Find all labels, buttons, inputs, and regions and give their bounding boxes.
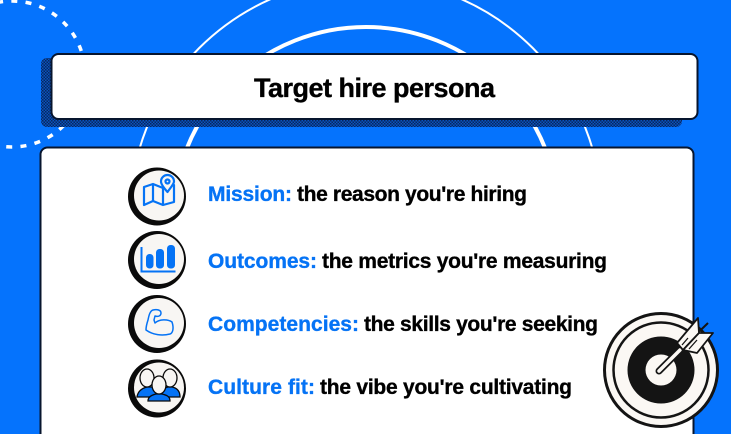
header drop shadow bbox=[41, 58, 682, 127]
arrow bbox=[659, 318, 713, 371]
icon: flexed arm bbox=[128, 295, 186, 353]
icon: bar chart bbox=[128, 231, 186, 289]
row 2 text: Outcomes: bbox=[208, 250, 317, 273]
row 4 text: the vibe you're cultivating bbox=[320, 376, 572, 399]
row 3 text: Competencies: bbox=[208, 313, 359, 336]
row 1 text: Mission: bbox=[208, 183, 292, 206]
row 3 text bbox=[208, 313, 598, 336]
icon: team of people bbox=[128, 360, 186, 418]
header panel bbox=[52, 54, 698, 119]
title: Target hire persona bbox=[254, 73, 496, 103]
icon: target with arrow bbox=[604, 314, 718, 426]
icon: map with location pin bbox=[128, 168, 186, 226]
row 4 text bbox=[208, 376, 572, 399]
row 2 text: the metrics you're measuring bbox=[322, 250, 607, 273]
row 4 text: Culture fit: bbox=[208, 376, 315, 399]
row 1 text: the reason you're hiring bbox=[297, 183, 527, 206]
main panel bbox=[40, 148, 694, 434]
row 3 text: the skills you're seeking bbox=[364, 313, 598, 336]
